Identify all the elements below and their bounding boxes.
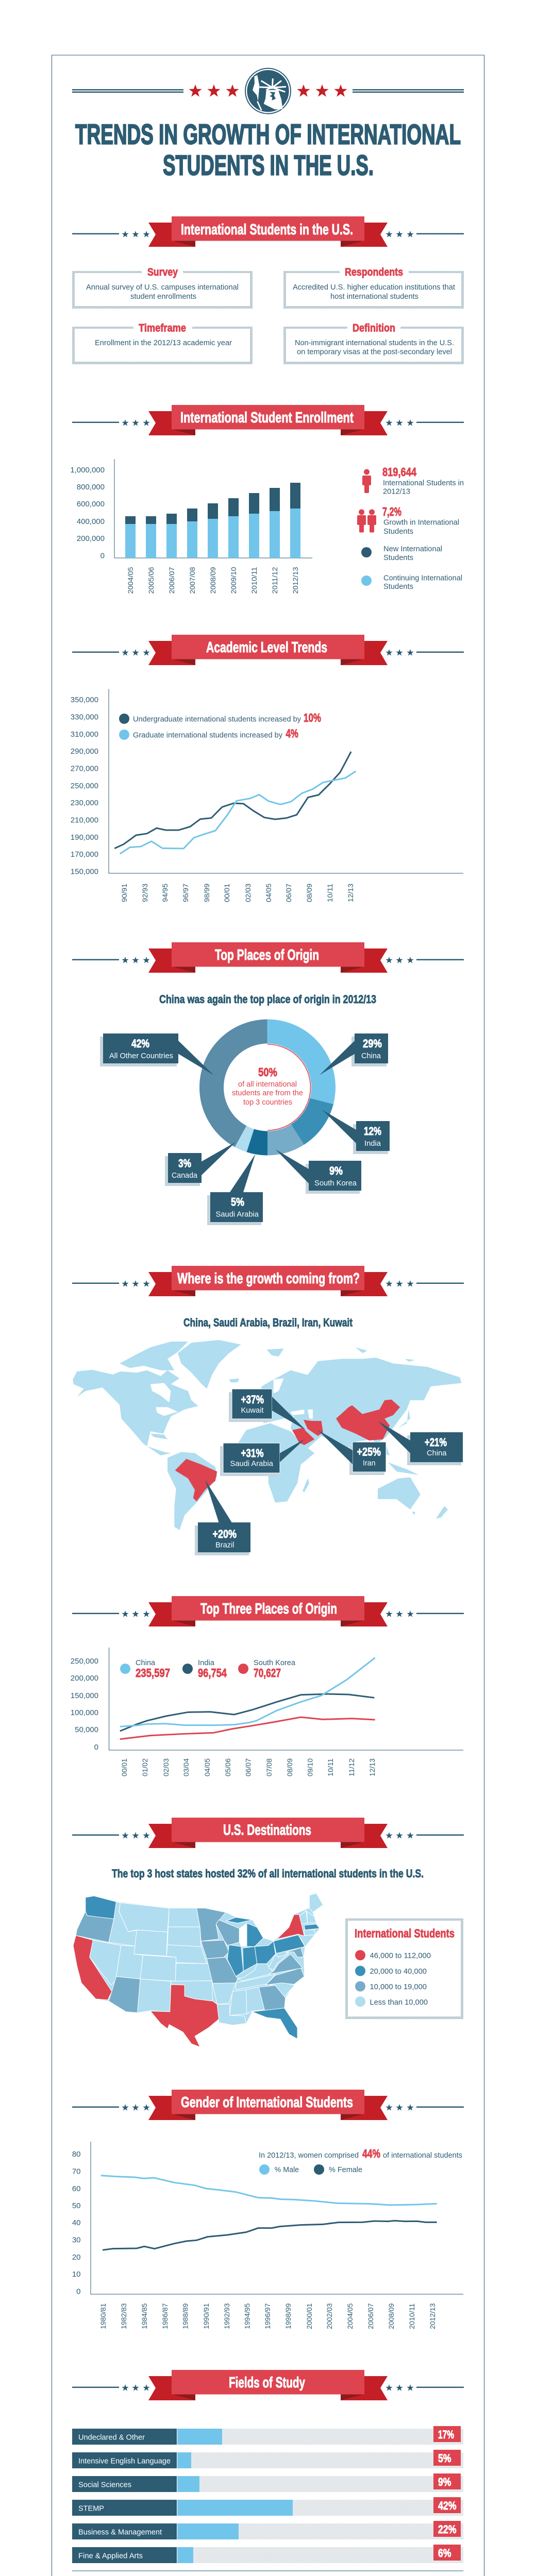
section ribbon: Where is the growth coming from?: Where is the growth coming from? (177, 1270, 360, 1287)
callout: saudi arabia +31%: +31% (241, 1447, 264, 1460)
callout: iran +25%: +25% (357, 1446, 381, 1458)
callout: kuwait +37% (229, 1389, 306, 1430)
panel: respondents: Respondents (345, 266, 403, 278)
section ribbon: Where is the growth coming from? (72, 1266, 464, 1296)
line chart: top three places: 09/10 (306, 1758, 314, 1776)
bar: business: Business & Management (78, 2528, 162, 2536)
line chart: academic level trends (71, 689, 463, 902)
legend: new students: Students (383, 553, 413, 562)
legend: continuing students: Students (383, 582, 413, 591)
line chart: academic level trends: 98/99 (203, 884, 211, 902)
line chart: gender (72, 2142, 463, 2329)
legend: new students (361, 545, 442, 562)
subheading: growth countries: China, Saudi Arabia, Brazil, Iran, Kuwait (183, 1316, 353, 1329)
section ribbon: International Student Enrollment (72, 405, 464, 435)
bar: intensive english (72, 2450, 463, 2468)
callout: brazil +20% (195, 1480, 250, 1555)
panel: definition: Definition (353, 323, 395, 334)
stat: 819,644 students: International Students in (383, 479, 464, 487)
bar chart: fields of study (72, 2426, 464, 2576)
legend: male female (259, 2164, 362, 2175)
section ribbon: U.S. Destinations: U.S. Destinations (223, 1822, 311, 1838)
panel: definition (283, 323, 464, 364)
line chart: gender: 10 (72, 2270, 80, 2279)
donut centre text (232, 1065, 303, 1107)
line chart: academic level trends: 96/97 (181, 884, 190, 902)
line chart: top three places: 07/08 (265, 1758, 273, 1776)
panel: timeframe: Timeframe (139, 323, 186, 334)
line chart: gender: 60 (72, 2184, 80, 2193)
line chart: academic level trends: 230,000 (71, 799, 98, 807)
line chart: gender: 2008/09 (387, 2303, 395, 2329)
line chart: academic level trends: 06/07 (284, 884, 293, 902)
line chart: gender: 2010/11 (408, 2303, 416, 2329)
bar: stemp: 42% (438, 2499, 457, 2512)
legend: undergraduate: 10% (304, 711, 321, 724)
subheading: China top place: China was again the top place of origin in 2012/13 (159, 993, 376, 1006)
stat: 819,644 students: 2012/13 (383, 487, 410, 496)
line chart: top three places: 00/01 (120, 1758, 128, 1776)
bar chart: enrollment (70, 459, 312, 594)
donut centre text: top 3 countries (243, 1098, 292, 1107)
line chart: gender: 30 (72, 2236, 80, 2245)
section ribbon: Fields of Study: Fields of Study (229, 2375, 305, 2391)
bar chart: enrollment: 2005/06 (147, 567, 155, 594)
section ribbon: International Student Enrollment: International Student Enrollment (180, 410, 354, 426)
legend: china: 235,597 (136, 1666, 170, 1680)
callout: women 44%: 44% (362, 2147, 380, 2160)
line chart: academic level trends: 330,000 (71, 713, 98, 721)
line chart: gender: 70 (72, 2167, 80, 2176)
legend: graduate: Graduate international students increased by (133, 731, 282, 740)
bar chart: enrollment: 200,000 (77, 534, 105, 543)
legend: continuing students (361, 574, 462, 591)
line chart: gender: 1994/95 (243, 2303, 252, 2329)
line chart: top three places: 06/07 (244, 1758, 253, 1776)
donut centre text: students are from the (232, 1089, 303, 1097)
bar: intensive english: 5% (438, 2452, 451, 2465)
line chart: academic level trends: 00/01 (223, 884, 231, 902)
panel: definition: Non-immigrant international students in the U.S. (295, 338, 454, 347)
bar: social sciences (72, 2473, 463, 2492)
legend: undergraduate (119, 711, 321, 724)
callout: kuwait +37%: +37% (241, 1393, 264, 1406)
stat: 7,2% growth (357, 505, 459, 536)
line chart: top three places: 02/03 (162, 1758, 170, 1776)
bar: undeclared (72, 2426, 463, 2445)
line chart: top three places: 0 (94, 1743, 98, 1752)
callout: china +21%: +21% (425, 1436, 447, 1449)
line chart: academic level trends: 94/95 (161, 884, 169, 902)
line chart: gender: 1996/97 (263, 2303, 272, 2329)
bar chart: enrollment: 800,000 (77, 483, 105, 492)
line chart: gender: 2004/05 (346, 2303, 354, 2329)
section ribbon: Academic Level Trends (72, 635, 464, 665)
section ribbon: Top Places of Origin: Top Places of Origin (215, 947, 319, 963)
title: STUDENTS IN THE U.S. (163, 149, 374, 181)
legend panel: international students by state: 46,000 to 112,000 (370, 1952, 431, 1960)
stat: 819,644 students (362, 465, 464, 496)
callout: women 44%: of international students (383, 2151, 462, 2160)
line chart: gender: 50 (72, 2201, 80, 2210)
callout: canada 3% (165, 1142, 236, 1186)
panel: timeframe (72, 323, 253, 364)
stat: 7,2% growth: 7,2% (382, 505, 401, 518)
line chart: academic level trends: 150,000 (71, 868, 98, 876)
line chart: academic level trends: 190,000 (71, 833, 98, 842)
section ribbon: Fields of Study (72, 2370, 464, 2400)
legend: new students: New International (383, 545, 442, 553)
line chart: top three places: 150,000 (71, 1691, 98, 1700)
legend: male female: % Female (329, 2165, 362, 2174)
callout: women 44%: In 2012/13, women comprised (259, 2151, 359, 2160)
legend panel: international students by state (345, 1919, 463, 2019)
line chart: academic level trends: 90/91 (120, 884, 128, 902)
line chart: top three places (71, 1648, 463, 1776)
legend: south korea (238, 1658, 296, 1680)
bar chart: enrollment: 1,000,000 (70, 466, 105, 474)
panel: respondents: Accredited U.S. higher education institutions that (293, 283, 456, 292)
section ribbon: Top Three Places of Origin (72, 1596, 464, 1626)
bar: stemp: STEMP (78, 2504, 104, 2513)
callout: women 44% (259, 2147, 462, 2160)
line chart: gender: 1992/93 (223, 2303, 231, 2329)
section ribbon: Gender of International Students (72, 2090, 464, 2120)
legend: india: India (198, 1658, 215, 1667)
callout: india 12%: 12% (364, 1125, 381, 1138)
line chart: gender: 2006/07 (366, 2303, 375, 2329)
line chart: gender: 1998/99 (284, 2303, 292, 2329)
section ribbon: Top Three Places of Origin: Top Three Places of Origin (200, 1601, 337, 1617)
bar chart: enrollment: 2007/08 (188, 567, 196, 594)
title (75, 118, 461, 181)
bar: social sciences: 9% (438, 2476, 451, 2488)
callout: canada 3%: 3% (178, 1157, 191, 1170)
line chart: top three places: 03/04 (182, 1758, 190, 1776)
bar: social sciences: Social Sciences (78, 2480, 131, 2489)
callout: canada 3%: Canada (172, 1171, 198, 1180)
legend: male female: % Male (275, 2165, 299, 2174)
line chart: academic level trends: 04/05 (264, 884, 273, 902)
line chart: gender: 2012/13 (428, 2303, 437, 2329)
bar chart: enrollment: 2008/09 (209, 567, 217, 594)
line chart: top three places: 200,000 (71, 1674, 98, 1683)
callout: all other countries 42% (100, 1033, 213, 1075)
line chart: academic level trends: 10/11 (326, 884, 334, 902)
bar chart: enrollment: 2010/11 (250, 567, 258, 594)
section ribbon: Top Places of Origin (72, 942, 464, 973)
line chart: academic level trends: 350,000 (71, 696, 98, 704)
icon: statue of liberty (245, 69, 291, 114)
stat: 7,2% growth: Growth in International (383, 518, 459, 527)
line chart: top three places: 01/02 (141, 1758, 149, 1776)
callout: saudi arabia 5%: Saudi Arabia (215, 1210, 259, 1219)
line chart: top three places: 250,000 (71, 1657, 98, 1666)
callout: all other countries 42%: All Other Countries (109, 1052, 173, 1060)
bar: stemp (72, 2497, 463, 2516)
callout: all other countries 42%: 42% (131, 1037, 149, 1050)
donut chart: top places of origin (211, 1031, 324, 1143)
line chart: gender: 1988/89 (181, 2303, 190, 2329)
callout: china 29%: China (361, 1052, 381, 1060)
us map (73, 1893, 323, 2047)
line chart: academic level trends: 170,000 (71, 850, 98, 859)
section ribbon: U.S. Destinations (72, 1818, 464, 1848)
line chart: gender: 40 (72, 2218, 80, 2227)
callout: south korea 9%: South Korea (314, 1179, 357, 1188)
line chart: academic level trends: 02/03 (244, 884, 252, 902)
panel: survey (72, 266, 253, 309)
line chart: top three places: 12/13 (368, 1758, 376, 1776)
bar: undeclared: Undeclared & Other (78, 2433, 145, 2442)
line chart: gender: 0 (76, 2287, 80, 2296)
callout: brazil +20%: +20% (212, 1528, 237, 1540)
legend: china: China (136, 1658, 156, 1667)
callout: saudi arabia 5%: 5% (231, 1196, 244, 1209)
callout: india 12%: India (364, 1139, 381, 1148)
legend: china (120, 1658, 170, 1680)
legend: india (182, 1658, 227, 1680)
legend panel: international students by state: International Students (355, 1927, 455, 1940)
line chart: academic level trends: 290,000 (71, 747, 98, 756)
callout: india 12% (322, 1110, 390, 1154)
line chart: top three places: 08/09 (286, 1758, 294, 1776)
panel: respondents: host international students (330, 292, 418, 301)
line chart: gender: 20 (72, 2253, 80, 2262)
bar: business (72, 2521, 463, 2539)
page frame (52, 55, 484, 2576)
line chart: gender: 1982/83 (120, 2303, 128, 2329)
stat: 819,644 students: 819,644 (382, 465, 416, 479)
callout: kuwait +37%: Kuwait (241, 1406, 264, 1415)
panel: survey: student enrollments (130, 292, 196, 301)
line chart: academic level trends: 250,000 (71, 782, 98, 790)
legend: south korea: 70,627 (254, 1666, 281, 1680)
legend panel: international students by state: 20,000 to 40,000 (370, 1967, 427, 1976)
subheading: top 3 host states: The top 3 host states hosted 32% of all international students in the U.S. (112, 1867, 424, 1880)
line chart: academic level trends: 210,000 (71, 816, 98, 824)
callout: south korea 9% (276, 1149, 361, 1194)
callout: saudi arabia +31%: Saudi Arabia (230, 1459, 274, 1468)
legend: india: 96,754 (198, 1666, 227, 1680)
legend: graduate (119, 727, 298, 740)
bar chart: enrollment: 0 (100, 551, 105, 561)
panel: survey: Annual survey of U.S. campuses international (86, 283, 239, 292)
donut centre text: of all international (238, 1080, 297, 1089)
stat: 7,2% growth: Students (383, 527, 413, 536)
section ribbon: International Students in the U.S. (72, 216, 464, 247)
map: highlighted countries (175, 1400, 400, 1501)
callout: brazil +20%: Brazil (215, 1540, 234, 1550)
bar: fine arts: Fine & Applied Arts (78, 2551, 143, 2560)
line chart: top three places: 10/11 (326, 1758, 334, 1776)
bar chart: enrollment: 400,000 (77, 517, 105, 526)
bar chart: enrollment: 2012/13 (291, 567, 299, 594)
panel: timeframe: Enrollment in the 2012/13 academic year (95, 338, 232, 347)
panel: definition: on temporary visas at the post-secondary level (297, 347, 452, 357)
callout: china +21% (378, 1421, 463, 1465)
legend: undergraduate: Undergraduate international students increased by (133, 715, 301, 724)
line chart: gender: 1986/87 (161, 2303, 169, 2329)
bar: business: 22% (438, 2523, 457, 2536)
callout: iran +25%: Iran (363, 1459, 375, 1468)
line chart: gender: 1984/85 (140, 2303, 148, 2329)
line chart: academic level trends: 08/09 (305, 884, 313, 902)
icon: person (362, 469, 371, 493)
legend panel: international students by state: 10,000 to 19,000 (370, 1982, 427, 1991)
section ribbon: Academic Level Trends: Academic Level Trends (206, 639, 327, 656)
line chart: gender: 1990/91 (202, 2303, 210, 2329)
line chart: gender: 1980/81 (99, 2303, 107, 2329)
callout: saudi arabia +31% (220, 1439, 305, 1476)
line chart: academic level trends: 92/93 (141, 884, 149, 902)
section ribbon: International Students in the U.S.: International Students in the U.S. (181, 222, 353, 238)
callout: saudi arabia 5% (207, 1154, 263, 1225)
bar chart: enrollment: 2006/07 (167, 567, 176, 594)
donut centre text: 50% (258, 1065, 277, 1079)
line chart: academic level trends: 310,000 (71, 730, 98, 739)
panel: respondents (283, 266, 464, 309)
line chart: top three places: 04/05 (203, 1758, 211, 1776)
line chart: gender: 80 (72, 2150, 80, 2159)
world map (73, 1340, 461, 1530)
panel: survey: Survey (147, 266, 178, 278)
bar: intensive english: Intensive English Language (78, 2456, 171, 2465)
legend panel: international students by state: Less than 10,000 (370, 1998, 428, 2007)
bar: fine arts (72, 2545, 463, 2563)
bar chart: enrollment: 2004/05 (126, 567, 135, 594)
icon: two people (357, 509, 376, 533)
callout: china 29% (320, 1033, 388, 1075)
legend: graduate: 4% (286, 727, 298, 740)
bar chart: enrollment: 2011/12 (271, 567, 279, 594)
callout: china +21%: China (427, 1449, 447, 1458)
line chart: academic level trends: 270,000 (71, 765, 98, 773)
line chart: gender: 2002/03 (325, 2303, 333, 2329)
section ribbon: Gender of International Students: Gender of International Students (181, 2094, 353, 2111)
line chart: top three places: 100,000 (71, 1708, 98, 1717)
callout: china 29%: 29% (363, 1037, 382, 1050)
callout: south korea 9%: 9% (329, 1164, 343, 1177)
bar: fine arts: 6% (438, 2547, 451, 2560)
line chart: top three places: 05/06 (224, 1758, 232, 1776)
bar: undeclared: 17% (438, 2428, 454, 2441)
legend: south korea: South Korea (254, 1658, 296, 1667)
line chart: academic level trends: 12/13 (346, 884, 355, 902)
line chart: top three places: 11/12 (347, 1758, 356, 1776)
callout: iran +25% (318, 1430, 386, 1475)
line chart: top three places: 50,000 (75, 1725, 98, 1734)
bar chart: enrollment: 600,000 (77, 500, 105, 509)
header emblem with stars (72, 69, 464, 114)
bar chart: enrollment: 2009/10 (229, 567, 238, 594)
line chart: gender: 2000/01 (305, 2303, 313, 2329)
legend: continuing students: Continuing International (383, 574, 462, 582)
